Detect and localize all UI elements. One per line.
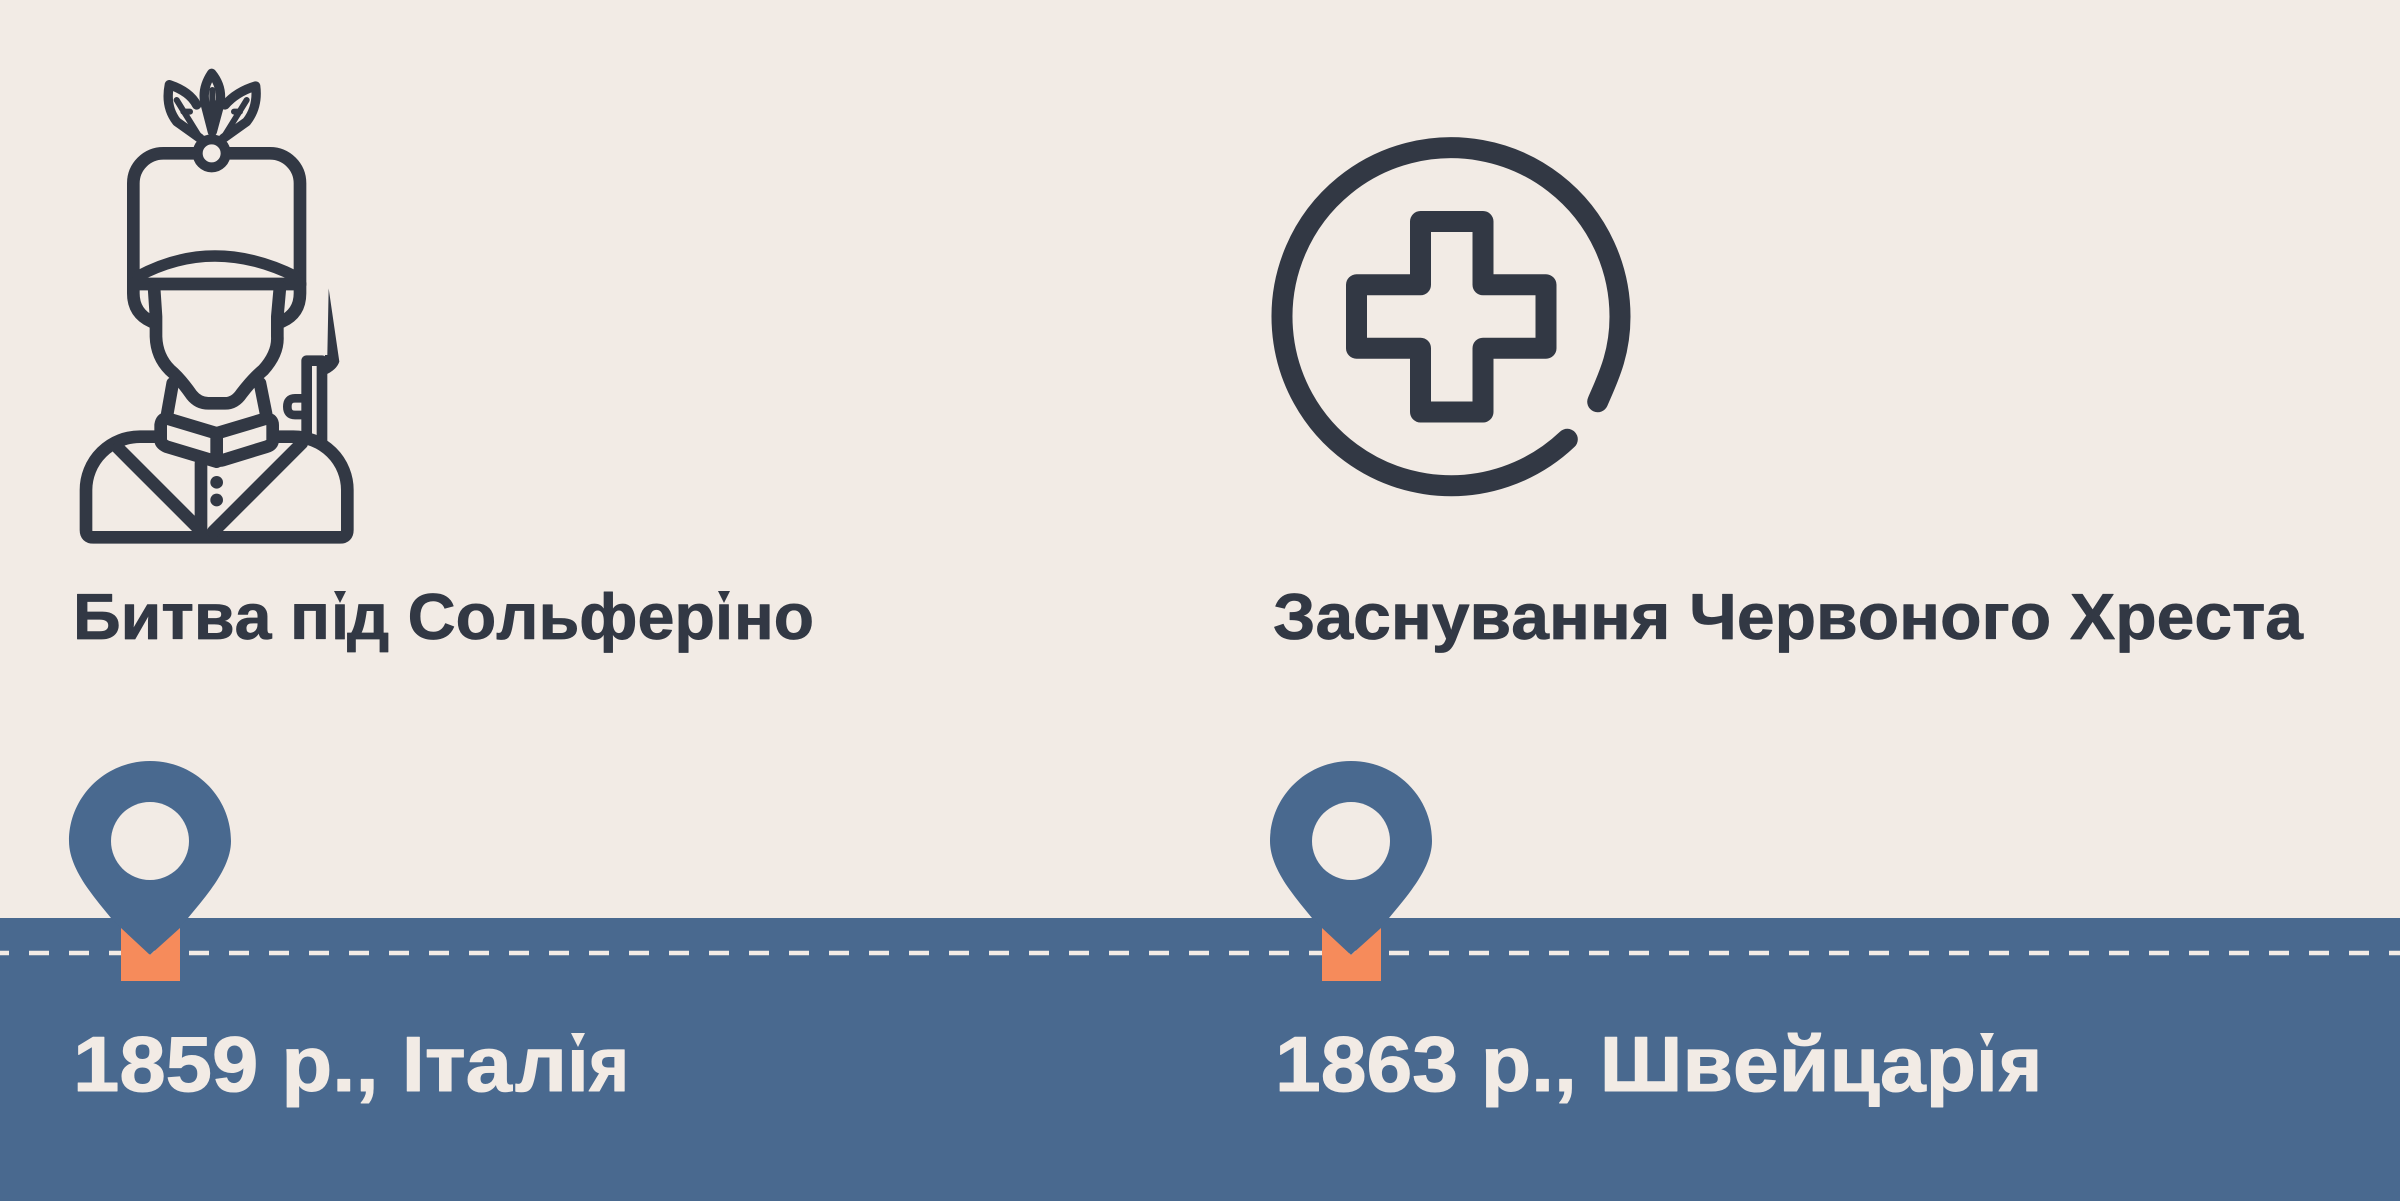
date: 1859 Italy: я <box>588 1020 629 1108</box>
icon: map pin 1859 <box>69 761 231 981</box>
heading: battle: і <box>715 580 733 653</box>
heading: battle: но <box>734 580 814 653</box>
heading: battle: Битва п <box>73 580 330 653</box>
icon: map pin 1863 <box>1270 761 1432 981</box>
date: 1859 Italy: л <box>515 1020 567 1108</box>
heading: battle: д Сольфер <box>347 580 715 653</box>
date: 1863 Switzerland: 1863 р., Швейцар <box>1275 1020 1976 1108</box>
icon: soldier <box>86 73 347 537</box>
icon: red cross <box>1282 148 1620 486</box>
date: 1863 Switzerland: я <box>1998 1020 2042 1108</box>
heading: battle <box>73 580 814 653</box>
date: 1863 Switzerland: і <box>1976 1020 1998 1108</box>
timeline band <box>0 918 2400 1201</box>
heading: battle: і <box>331 580 349 653</box>
date: 1859 Italy: 1859 р., Іта <box>73 1020 513 1108</box>
heading: founding: Заснування Червоного Хреста <box>1273 580 2304 653</box>
date: 1859 Italy: і <box>567 1020 589 1108</box>
